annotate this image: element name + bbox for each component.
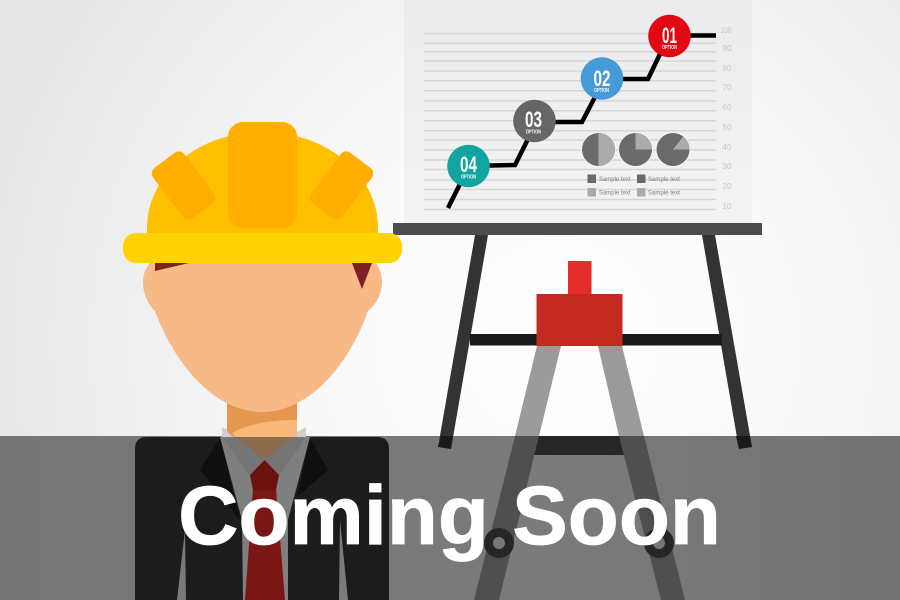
collar tips	[222, 427, 306, 437]
marker 01: 01	[662, 23, 677, 48]
dark banner band	[0, 436, 900, 600]
chart axis values: 100	[720, 26, 732, 35]
pie charts	[581, 132, 690, 167]
hat side pad left	[149, 149, 218, 222]
easel back legs	[438, 235, 752, 449]
chart axis values	[720, 26, 732, 211]
board shelf	[393, 223, 762, 235]
marker 04: OPTION	[461, 174, 476, 180]
chart axis values: 80	[723, 64, 732, 73]
hat center pad	[228, 122, 297, 228]
hat dome	[147, 132, 378, 236]
marker 03: OPTION	[526, 130, 541, 136]
Coming Soon headline: Coming Soon	[178, 468, 721, 562]
pie chart legend: Sample text	[648, 176, 680, 183]
easel	[438, 235, 752, 600]
pie chart legend: Sample text	[599, 176, 631, 183]
easel crossbar	[470, 334, 722, 346]
pie chart legend	[588, 174, 680, 196]
shirt	[220, 437, 310, 600]
red clamp	[536, 261, 622, 346]
presentation board	[393, 0, 762, 235]
necktie	[245, 460, 285, 600]
hat brim	[123, 233, 402, 263]
marker 02	[581, 57, 623, 100]
neck	[227, 395, 297, 459]
pie chart legend: Sample text	[648, 190, 680, 196]
jacket seams	[177, 520, 348, 600]
suit jacket	[135, 437, 389, 600]
easel lower bar	[533, 436, 625, 455]
marker 01: OPTION	[662, 45, 677, 51]
marker 02: 02	[594, 66, 610, 91]
construction worker	[123, 122, 402, 600]
easel front legs	[474, 346, 685, 600]
easel wheels	[488, 532, 670, 554]
marker 03: 03	[525, 107, 542, 132]
marker 01	[648, 15, 691, 57]
stepped trend line	[448, 36, 716, 208]
chart axis values: 60	[723, 103, 732, 112]
hat side pad right	[307, 149, 376, 222]
marker 02: OPTION	[594, 88, 609, 94]
chart axis values: 90	[723, 44, 732, 53]
marker 03	[513, 100, 556, 142]
face	[143, 258, 382, 412]
pie chart legend: Sample text	[599, 190, 631, 196]
chart axis values: 30	[723, 162, 732, 171]
chart axis values: 70	[723, 83, 732, 92]
chart axis values: 20	[723, 182, 732, 191]
chart axis values: 50	[723, 123, 732, 132]
marker 04: 04	[460, 152, 478, 177]
collar shadow	[222, 437, 306, 476]
hair	[155, 258, 372, 289]
chart axis values: 10	[723, 202, 732, 211]
chart grid lines	[424, 34, 716, 210]
lapels	[200, 438, 328, 520]
hard hat	[123, 122, 402, 263]
chart axis values: 40	[723, 143, 732, 152]
board sheet	[404, 0, 752, 223]
marker 04	[447, 145, 490, 187]
